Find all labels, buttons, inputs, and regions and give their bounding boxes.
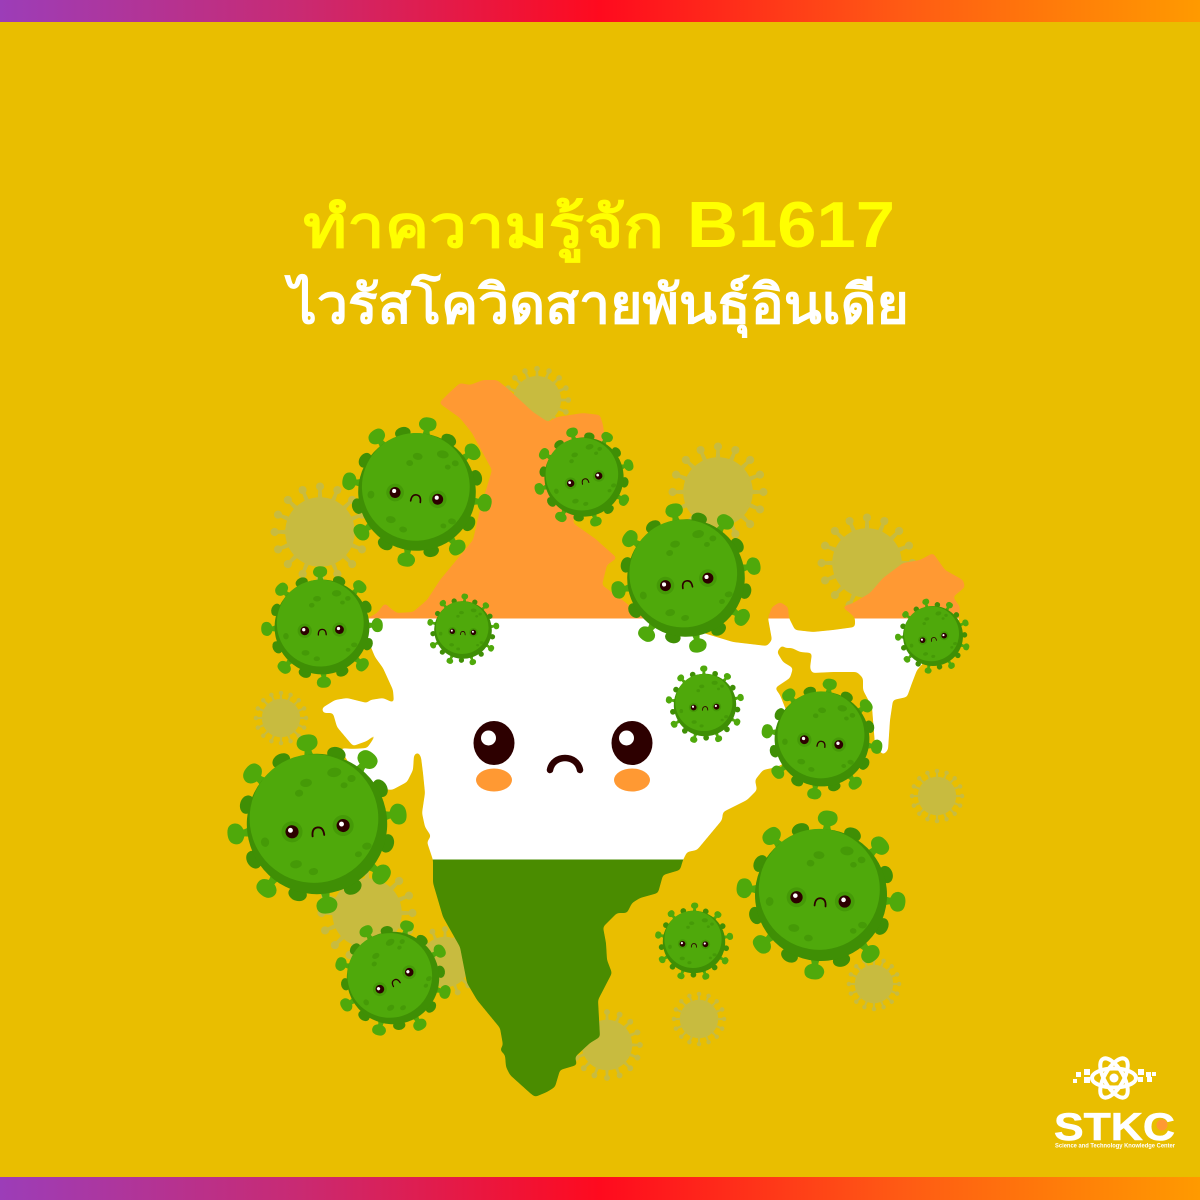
title line 2: ไวรัสโควิดสายพันธุ์อินเดีย [284, 273, 909, 339]
logo orange dot [1156, 1120, 1168, 1130]
right eye [612, 721, 652, 765]
map orange band [368, 380, 964, 618]
title [284, 188, 909, 339]
map of India in flag colours [322, 380, 964, 1096]
background faded viruses [254, 366, 964, 1081]
left eye [474, 721, 514, 765]
logo pixel squares [1073, 1069, 1156, 1083]
STKC logo [1054, 1054, 1176, 1150]
map white band [300, 618, 990, 860]
left cheek [476, 768, 512, 792]
logo tagline: Science and Technology Knowledge Center [1055, 1144, 1176, 1150]
sad mouth [550, 758, 580, 770]
logo wordmark: STKC [1054, 1106, 1175, 1149]
right cheek [614, 768, 650, 792]
logo atom icon [1092, 1054, 1136, 1102]
virus characters [217, 406, 978, 1059]
map green band [432, 860, 684, 1096]
title line 1: ทำความรู้จัก [303, 195, 664, 263]
title line 1 [303, 188, 895, 263]
bottom gradient bar [0, 1177, 1200, 1200]
top gradient bar [0, 0, 1200, 22]
map face [474, 721, 652, 792]
title line 1: B1617 [687, 188, 895, 261]
